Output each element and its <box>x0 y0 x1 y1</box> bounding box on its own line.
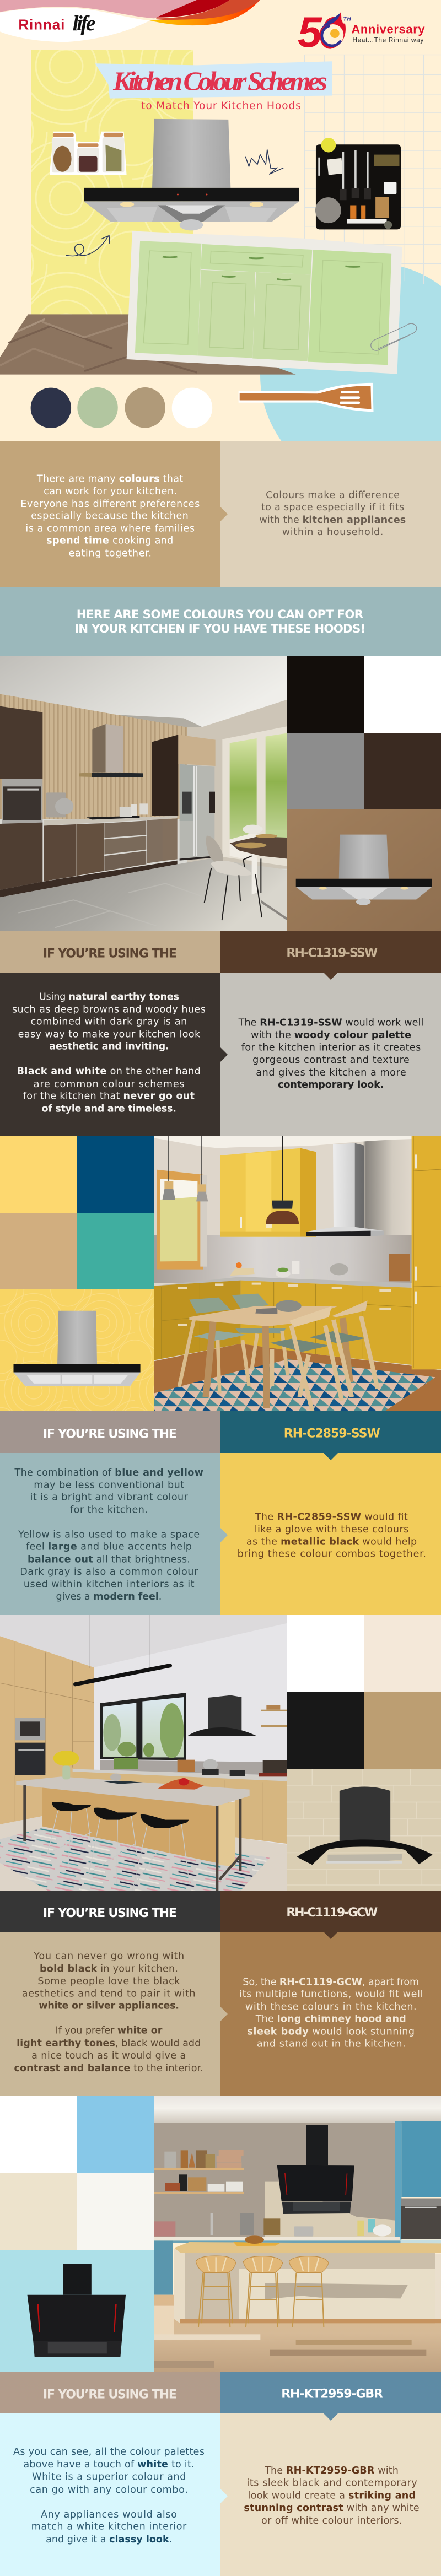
panel: text scheme 3 right: and stand out in the kitchen. <box>257 2038 406 2049</box>
panel: text scheme 3 left: If you prefer white or <box>56 2025 163 2036</box>
panel: text scheme 2 left: gives a modern feel. <box>56 1591 162 1602</box>
panel: text scheme 2 left: may be less conventional but <box>34 1480 184 1491</box>
panel: text scheme 3 left: aesthetics and tend to pair it with <box>22 1989 196 2000</box>
panel: text scheme 3 right: So, the RH-C1119-GCW, apart from <box>243 1977 419 1988</box>
wooden spatula <box>239 383 374 412</box>
panel: text scheme 1 left: for the kitchen that never go out <box>23 1091 195 1102</box>
panel: text scheme 2 left: used within kitchen interiors as it <box>24 1579 195 1590</box>
arrow: scheme 4 right notch <box>220 2489 228 2503</box>
panel: text scheme 1 right: contemporary look. <box>278 1079 384 1090</box>
panel: text scheme 2 right <box>220 1453 441 1615</box>
logo: 50th anniversary: 50 <box>298 8 343 56</box>
panel: swatches scheme 1 <box>287 656 441 809</box>
header left: scheme 1 <box>0 931 220 973</box>
panel: text scheme 3 left: white or silver appliances. <box>39 2001 179 2012</box>
panel: text scheme 4 left: above have a touch of white to it. <box>23 2459 195 2470</box>
photo: black and wood kitchen <box>0 1615 287 1891</box>
scribble crown <box>245 149 283 174</box>
text: intro left: is a common area where families <box>25 523 195 534</box>
title: to Match Your Kitchen Hoods <box>141 100 301 112</box>
panel: text scheme 3 right: with these colours in the kitchen. <box>245 2002 417 2013</box>
arrow: scheme 1 down notch <box>324 973 338 980</box>
panel: text scheme 1 right: with the woody colour palette <box>251 1030 411 1041</box>
panel: text scheme 4 right <box>220 2413 441 2576</box>
panel: text scheme 4 left: match a white kitchen interior <box>31 2521 187 2532</box>
panel: text scheme 1 left: aesthetic and inviting. <box>49 1041 169 1052</box>
header left: scheme 4 <box>0 2372 220 2413</box>
panel: text scheme 2 left: The combination of blue and yellow <box>14 1467 203 1478</box>
header left: scheme 2: IF YOU’RE USING THE <box>43 1427 177 1441</box>
panel: text scheme 1 left: easy way to make your kitchen look <box>18 1029 201 1040</box>
panel: text scheme 2 left: balance out all that brightness. <box>28 1554 190 1565</box>
panel: text scheme 3 right: sleek body would look stunning <box>247 2026 415 2037</box>
panel: text scheme 2 left: for the kitchen. <box>70 1505 148 1516</box>
header left: scheme 3 <box>0 1891 220 1932</box>
panel: text scheme 2 left: Dark gray is also a common colour <box>20 1567 198 1578</box>
panel: text scheme 4 right: stunning contrast with any white <box>244 2503 420 2514</box>
spice jars <box>50 132 127 175</box>
panel: text scheme 1 right: for the kitchen interior as it creates <box>241 1042 421 1053</box>
panel: text scheme 3 left <box>0 1932 220 2096</box>
hero collage <box>0 50 441 441</box>
panel: text scheme 4 left: can go with any colour combo. <box>30 2485 188 2496</box>
logo: 50th anniversary: Anniversary <box>351 23 425 36</box>
panel: text scheme 1 left: such as deep browns and woody hues <box>12 1005 206 1016</box>
logo: 50th anniversary: Heat...The Rinnai way <box>352 36 423 44</box>
pegboard with utensils <box>315 138 401 229</box>
panel: text scheme 1 left: combined with dark gray is an <box>31 1016 187 1027</box>
panel: text scheme 3 left: Some people love the black <box>37 1976 180 1987</box>
panel: text scheme 1 left: are common colour schemes <box>34 1079 185 1090</box>
text: intro right <box>259 490 406 538</box>
text: intro left: eating together. <box>68 548 152 559</box>
logo: 50th anniversary: TH <box>343 17 351 23</box>
panel: text scheme 3 left: light earthy tones, black would add <box>17 2038 201 2049</box>
panel: swatches scheme 2 <box>0 1136 154 1290</box>
panel: text scheme 4 left: As you can see, all the colour palettes <box>13 2447 205 2458</box>
blue paper circle <box>260 267 441 441</box>
panel: text scheme 1 left: of style and are timeless. <box>42 1104 176 1115</box>
text: intro right: Colours make a difference <box>266 490 400 501</box>
panel: text scheme 2 right: like a glove with these colours <box>255 1524 408 1535</box>
panel: text scheme 2 right: The RH-C2859-SSW would fit <box>255 1511 408 1522</box>
arrow: scheme 4 down notch <box>324 2413 338 2421</box>
panel: text scheme 2 left <box>0 1453 220 1615</box>
header left: scheme 3: IF YOU’RE USING THE <box>43 1907 177 1920</box>
photo: yellow kitchen <box>154 1136 441 1412</box>
logo: 50th anniversary <box>298 8 425 56</box>
hood on blue RH-KT2959-GBR <box>0 2250 154 2372</box>
panel: text scheme 4 left: Any appliances would also <box>41 2509 177 2520</box>
scribble arrow <box>66 236 110 256</box>
logo: Rinnai life: life <box>73 11 95 35</box>
panel: text scheme 1 right: and gives the kitchen a more <box>256 1067 406 1078</box>
panel: text scheme 3 right: its multiple functions, would fit well <box>239 1989 423 2000</box>
logo: Rinnai life: Rinnai <box>18 16 64 33</box>
header right: RH-KT2959-GBR: RH-KT2959-GBR <box>281 2387 383 2401</box>
panel: text scheme 1 right <box>220 973 441 1136</box>
arrow: intro notch <box>220 507 228 521</box>
panel: text scheme 4 right: look would create a striking and <box>248 2491 416 2502</box>
panel: text scheme 4 right: or off white colour interiors. <box>261 2515 402 2526</box>
header right: RH-C2859-SSW <box>220 1411 441 1453</box>
panel: text scheme 2 left: Yellow is also used to make a space <box>18 1530 200 1541</box>
arrow: scheme 3 down notch <box>324 1932 338 1939</box>
text: intro left: Everyone has different preferences <box>20 499 200 510</box>
banner: heading <box>0 587 441 656</box>
panel: text scheme 4 right: The RH-KT2959-GBR with <box>264 2465 399 2476</box>
photo: brown kitchen <box>0 656 287 931</box>
panel: text scheme 1 left <box>0 973 220 1136</box>
panel: intro right <box>220 441 441 587</box>
header right: RH-KT2959-GBR <box>220 2372 441 2413</box>
arrow: scheme 2 right notch <box>220 1528 228 1542</box>
panel: text scheme 2 left: it is a bright and vibrant colour <box>30 1492 189 1503</box>
hero background <box>0 0 441 441</box>
header right: RH-C2859-SSW: RH-C2859-SSW <box>284 1427 380 1440</box>
arrow: scheme 2 down notch <box>324 1453 338 1460</box>
text: intro right: to a space especially if it fits <box>261 502 404 513</box>
header left: scheme 2 <box>0 1411 220 1453</box>
text: intro right: within a household. <box>282 527 383 538</box>
header left: scheme 4: IF YOU’RE USING THE <box>43 2388 177 2401</box>
panel: text scheme 4 left: and give it a classy look. <box>46 2534 172 2545</box>
text: intro left: There are many colours that <box>36 473 183 484</box>
header right: RH-C1319-SSW <box>220 931 441 973</box>
paper clip <box>371 323 417 350</box>
green cabinet paper cut-out <box>127 231 402 374</box>
arrow: scheme 3 right notch <box>220 2007 228 2021</box>
panel: swatches scheme 3 <box>287 1615 441 1769</box>
panel: text scheme 4 left <box>0 2413 220 2576</box>
panel: text scheme 2 left: feel large and blue accents help <box>26 1541 192 1552</box>
colour palette dots <box>31 387 212 428</box>
hood illustration RH-C1319 <box>84 119 299 230</box>
panel: text scheme 3 right: The long chimney hood and <box>255 2013 406 2024</box>
title <box>95 61 332 112</box>
panel: swatches scheme 4 <box>0 2096 154 2250</box>
text: intro left: can work for your kitchen. <box>44 486 177 497</box>
banner: heading: IN YOUR KITCHEN IF YOU HAVE THESE HOODS! <box>74 622 365 636</box>
panel: text scheme 3 left: contrast and balance to the interior. <box>14 2063 203 2074</box>
panel: text scheme 2 right: as the metallic black would help <box>246 1536 417 1547</box>
grid paper <box>305 55 441 284</box>
panel: text scheme 4 left: White is a superior colour and <box>32 2471 186 2482</box>
header right: RH-C1119-GCW: RH-C1119-GCW <box>286 1906 378 1920</box>
text: intro left: especially because the kitchen <box>31 511 189 522</box>
panel: text scheme 1 right: gorgeous contrast and texture <box>252 1055 410 1066</box>
hood on yellow RH-C2859-SSW <box>0 1289 154 1411</box>
panel: text scheme 4 right: its sleek black and contemporary <box>246 2478 417 2489</box>
yellow wallpaper <box>31 50 193 315</box>
panel: text scheme 1 right: The RH-C1319-SSW would work well <box>238 1018 423 1029</box>
hood on brick RH-C1119-GCW <box>287 1769 441 1891</box>
panel: text scheme 3 left: a nice touch as it would give a <box>31 2050 186 2061</box>
header right: RH-C1119-GCW <box>220 1891 441 1932</box>
text: intro left: spend time cooking and <box>46 536 173 547</box>
panel: text scheme 2 right: bring these colour combos together. <box>238 1549 426 1560</box>
logo: Rinnai life <box>18 11 95 35</box>
panel: text scheme 1 left: Using natural earthy tones <box>39 992 179 1003</box>
banner: heading: HERE ARE SOME COLOURS YOU CAN OPT FOR <box>77 608 364 622</box>
panel: intro left <box>0 441 220 587</box>
hood on wood RH-C1319-SSW <box>287 809 441 931</box>
panel: text scheme 1 left: Black and white on the other hand <box>17 1066 201 1077</box>
panel: text scheme 3 right <box>220 1932 441 2096</box>
top brand swoosh <box>0 0 260 42</box>
photo: blue kitchen <box>154 2096 441 2372</box>
panel: text scheme 3 left: You can never go wrong with <box>33 1951 184 1962</box>
text: intro left <box>20 473 200 559</box>
header right: RH-C1319-SSW: RH-C1319-SSW <box>286 947 378 960</box>
title: Kitchen Colour Schemes <box>112 66 327 96</box>
arrow: scheme 1 right notch <box>220 1047 228 1062</box>
panel: text scheme 3 left: bold black in your kitchen. <box>40 1964 178 1975</box>
text: intro right: with the kitchen appliances <box>259 515 406 526</box>
herringbone wood floor <box>0 314 296 375</box>
paper tape <box>95 61 332 99</box>
header left: scheme 1: IF YOU’RE USING THE <box>43 947 177 961</box>
